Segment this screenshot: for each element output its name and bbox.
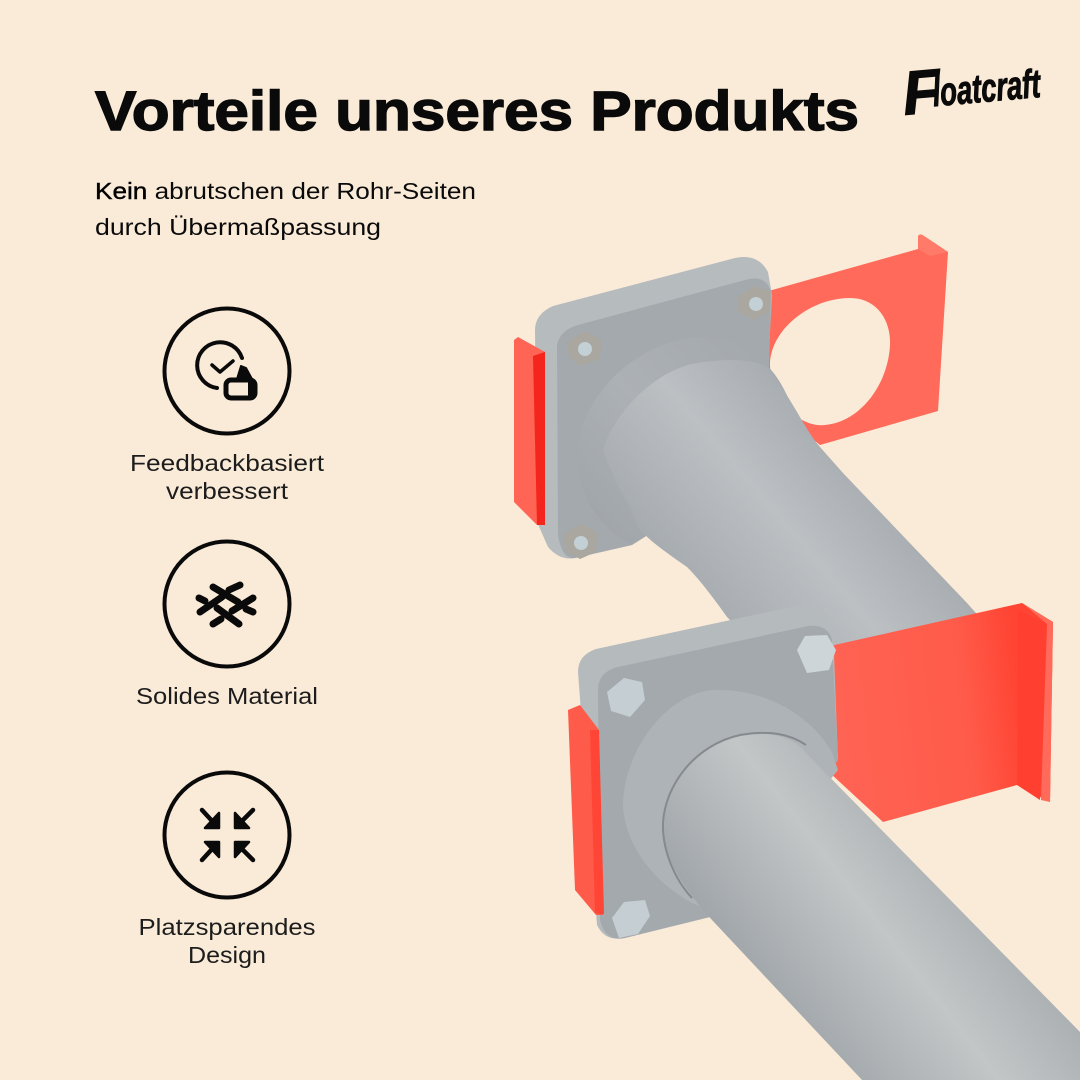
subtitle text: Kein abrutschen der Rohr-Seiten: [95, 178, 476, 204]
upper left red tab: [514, 337, 545, 525]
label: Solides Material: Solides Material: [136, 683, 318, 709]
label: Feedbackbasiert verbessert: Feedbackbasiert: [130, 450, 325, 476]
logo: Floatcraft: F: [900, 57, 946, 129]
subtitle text: durch Übermaßpassung: [95, 214, 381, 240]
product illustration: pipes with brackets: [514, 234, 1080, 1080]
label: Platzsparendes Design: [138, 914, 316, 968]
label: Platzsparendes Design: Platzsparendes: [138, 914, 316, 940]
label: Feedbackbasiert verbessert: [130, 450, 325, 504]
logo: Floatcraft: [900, 48, 1044, 129]
lower plate: [578, 605, 838, 939]
lower left red tab: [568, 705, 604, 915]
lower pipe: [663, 734, 1080, 1080]
pipe socket edge: [663, 733, 806, 898]
upper nuts: [563, 286, 771, 559]
upper red back plate with hole: [765, 234, 948, 445]
icon circle: material: [164, 542, 290, 666]
upper coupling: [577, 337, 800, 545]
subtitle text: [95, 178, 476, 240]
upper plate: [535, 257, 772, 559]
icon circle: feedback: [164, 308, 290, 434]
icon: woven strands: [199, 585, 253, 624]
label: Platzsparendes Design: Design: [188, 942, 266, 968]
feature: Solides Material: [164, 542, 290, 666]
feature: Platzsparendes Design: [164, 772, 290, 898]
feature: Feedbackbasiert verbessert: [164, 308, 290, 434]
upper pipe body: [603, 360, 1000, 690]
title: Vorteile unseres Produkts: [95, 79, 859, 142]
icon: compress arrows: [202, 810, 253, 860]
lower red back plate: [830, 603, 1053, 822]
label: Feedbackbasiert verbessert: verbessert: [166, 478, 289, 504]
icon: check and thumbs up: [197, 342, 255, 398]
icon circle: design: [164, 772, 290, 898]
lower collar: [623, 690, 838, 915]
lower bolts: [607, 635, 836, 938]
